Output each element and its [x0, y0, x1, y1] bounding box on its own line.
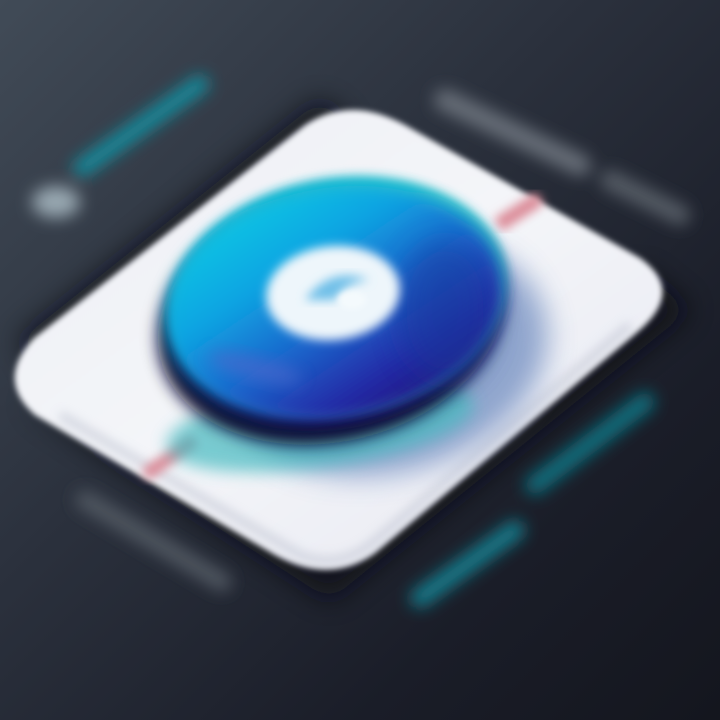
accent: bottom-right teal bars	[420, 402, 645, 598]
accent: bottom-left gray bar	[85, 500, 222, 582]
center ring icon	[261, 239, 405, 347]
red mark: bottom left	[145, 440, 195, 475]
disc face	[147, 160, 523, 448]
disc lower sheen	[206, 346, 304, 390]
card bottom edge shading	[60, 325, 630, 561]
white card	[15, 110, 663, 570]
accent: top-left teal bar	[32, 84, 200, 218]
card shadow	[20, 100, 690, 600]
blue disc	[134, 150, 526, 476]
red mark: top right	[498, 198, 540, 225]
lower teal glow	[161, 362, 479, 488]
ring inner	[305, 276, 370, 300]
ring inner highlight	[338, 291, 366, 309]
disc rim	[150, 150, 526, 442]
accent: top-left light blob	[32, 186, 80, 218]
accent: top-right gray bar	[445, 100, 680, 215]
disc dark underside	[134, 164, 526, 476]
disc shadow	[196, 201, 574, 509]
disc right dark	[397, 240, 493, 380]
